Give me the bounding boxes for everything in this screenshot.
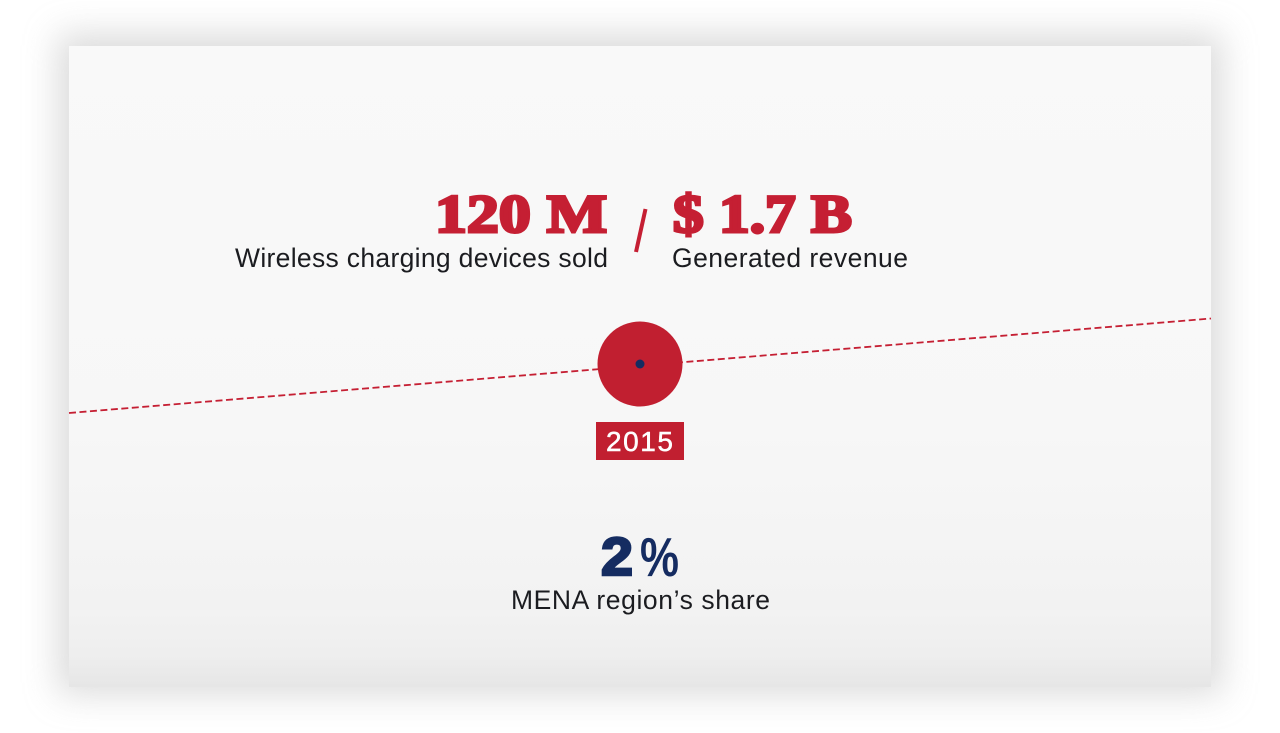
number: 120 M: 120 M bbox=[435, 184, 607, 244]
slash divider bbox=[636, 209, 646, 252]
label: generated revenue: Generated revenue bbox=[672, 243, 908, 273]
year badge bbox=[596, 422, 684, 460]
percent sign: % bbox=[640, 526, 679, 588]
timeline marker: 2015 bbox=[598, 322, 682, 406]
stat: revenue bbox=[672, 184, 908, 273]
stat: MENA share bbox=[511, 526, 770, 615]
stat: devices sold bbox=[235, 184, 608, 273]
label: wireless charging devices sold: Wireless charging devices sold bbox=[235, 243, 608, 273]
number: $ 1.7 B: $ 1.7 B bbox=[673, 184, 852, 244]
dashed timeline bbox=[69, 318, 1211, 413]
year badge: 2015 bbox=[606, 426, 673, 457]
number: 2: 2 bbox=[601, 527, 633, 587]
label: MENA region's share: MENA region’s share bbox=[511, 585, 770, 615]
